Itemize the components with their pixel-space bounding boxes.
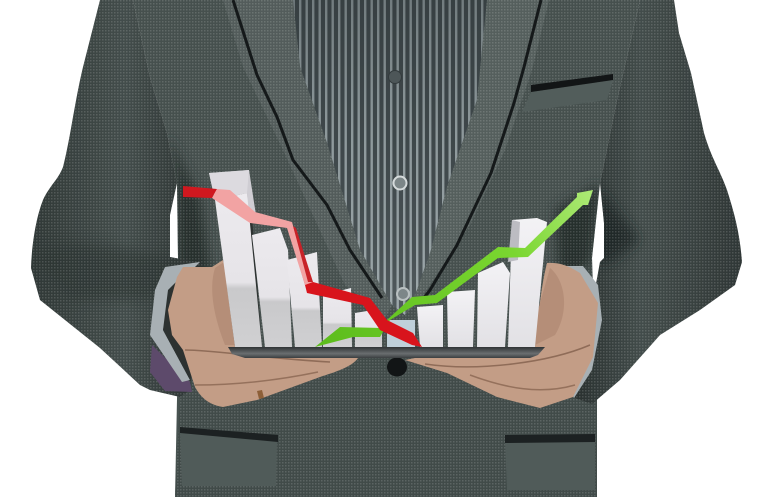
green rising arrow xyxy=(315,190,593,347)
shirt buttons xyxy=(388,70,409,300)
shirt xyxy=(293,0,487,315)
left cuff with purple lining xyxy=(150,262,200,392)
red falling arrow xyxy=(183,186,422,347)
left lapel xyxy=(223,0,392,318)
bar 3 xyxy=(287,252,322,347)
bar 10 xyxy=(508,218,547,347)
ring xyxy=(257,390,264,399)
bar 8 xyxy=(447,290,475,347)
tablet xyxy=(228,347,545,358)
bar chart xyxy=(209,170,547,347)
bar 5 xyxy=(355,310,382,347)
left sleeve xyxy=(31,0,203,397)
bar 4 xyxy=(323,288,352,347)
bar 1 xyxy=(209,170,262,347)
bar 6 xyxy=(387,320,415,347)
left hand xyxy=(168,260,358,407)
lower left pocket xyxy=(180,427,278,486)
bar 9 xyxy=(477,262,510,347)
breast pocket xyxy=(522,74,613,112)
lower right pocket xyxy=(505,434,595,490)
right cuff xyxy=(560,266,602,398)
bar 2 xyxy=(252,228,292,347)
right sleeve xyxy=(575,0,742,404)
suit torso xyxy=(133,0,640,497)
bar 7 xyxy=(417,305,443,347)
right hand xyxy=(405,263,598,408)
right lapel xyxy=(405,0,549,315)
jacket button xyxy=(387,358,407,376)
